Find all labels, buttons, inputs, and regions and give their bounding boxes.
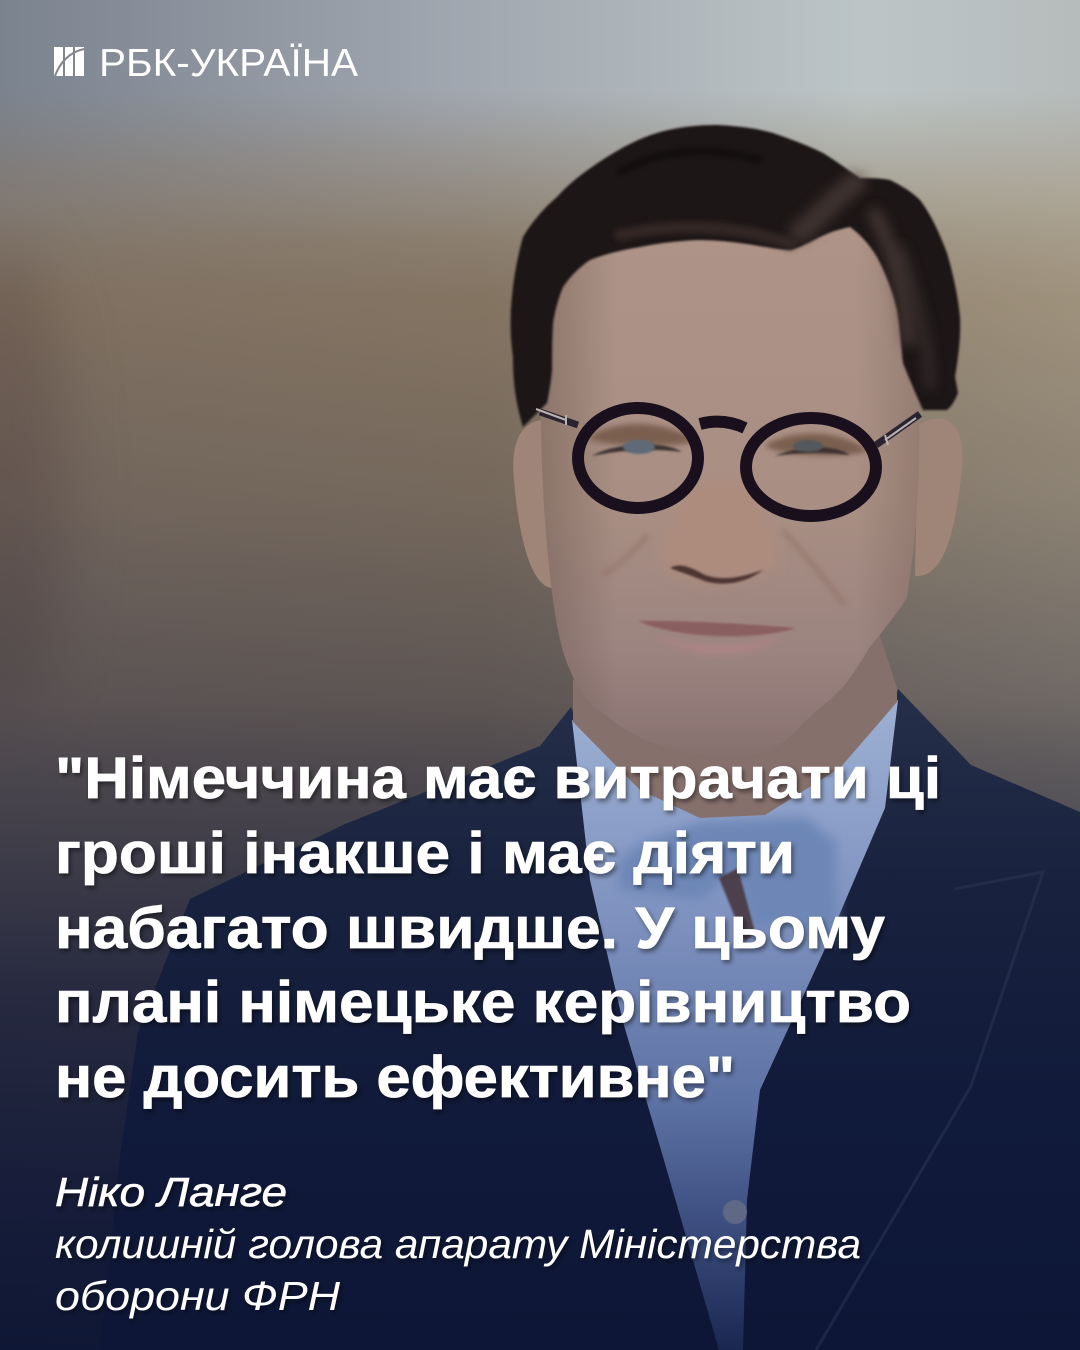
hair highlights (620, 151, 930, 385)
icon: logo columns (54, 47, 84, 76)
attribution: speaker name and title: оборони ФРН (55, 1273, 340, 1319)
logo: РБК-Україна (54, 42, 358, 85)
quote text: набагато швидше. У цьому (55, 896, 885, 961)
glasses (536, 408, 920, 516)
quote text: "Німеччина має витрачати ці (55, 746, 941, 811)
hair (511, 125, 960, 427)
attribution: speaker name and title: Ніко Ланге (55, 1169, 287, 1215)
jacket lapel seam (816, 872, 1043, 1350)
shirt (572, 700, 898, 1350)
neck (573, 630, 897, 818)
quote text (55, 746, 941, 1110)
shirt collar shadow (619, 817, 836, 945)
open collar neck wedge (719, 868, 755, 942)
smile (638, 621, 796, 654)
attribution: speaker name and title: колишній голова апарату Міністерства (55, 1221, 861, 1267)
quote text: плані німецьке керівництво (55, 970, 911, 1035)
ears (513, 419, 963, 588)
quote text: гроші інакше і має діяти (55, 821, 795, 886)
face (541, 194, 919, 756)
wordmark: РБК-УКРАЇНА (99, 42, 358, 85)
eyes and brows (588, 424, 868, 456)
top grey haze (0, 0, 1080, 260)
cheek folds (602, 530, 845, 605)
shirt button (723, 1200, 747, 1224)
attribution: speaker name and title (55, 1169, 861, 1319)
jacket (100, 689, 1080, 1350)
nose (660, 480, 778, 584)
quote text: не досить ефективне" (55, 1045, 735, 1110)
